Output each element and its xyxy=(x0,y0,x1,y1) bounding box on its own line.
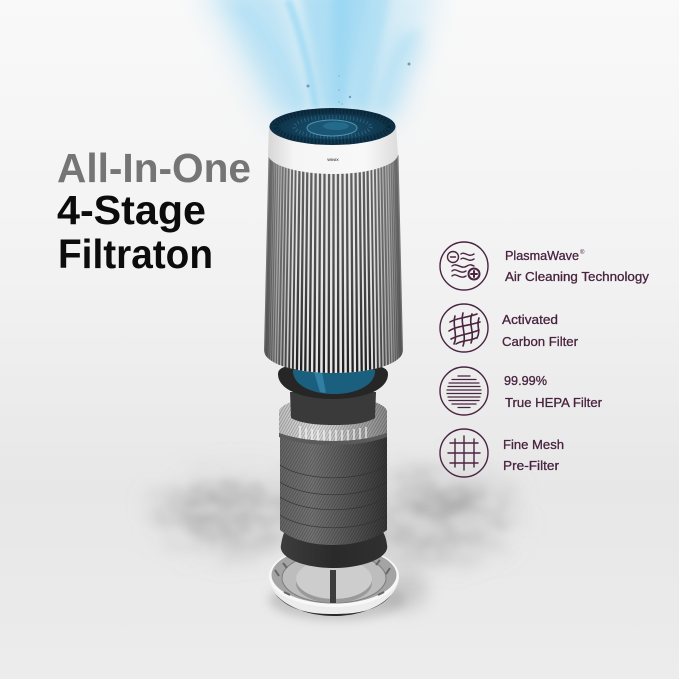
label: Fine Mesh xyxy=(503,437,564,452)
outer striped cylinder body xyxy=(264,155,403,373)
label: 99.99% xyxy=(504,373,547,388)
label: True HEPA Filter xyxy=(505,395,603,410)
icon: plasma waves xyxy=(440,242,488,290)
top air outlet grille xyxy=(270,108,396,145)
title xyxy=(57,145,251,277)
label xyxy=(503,437,564,473)
label: Carbon Filter xyxy=(502,334,579,349)
title: Filtraton xyxy=(58,231,213,277)
white top band xyxy=(268,126,398,174)
label: ® xyxy=(580,249,585,256)
feature: carbon filter xyxy=(440,304,579,352)
icon: HEPA lines xyxy=(440,367,488,415)
feature: pre-filter xyxy=(440,429,564,477)
clean blue air stream xyxy=(195,0,440,125)
label: Air Cleaning Technology xyxy=(505,269,650,284)
feature: PlasmaWave xyxy=(440,242,650,290)
feature: HEPA filter xyxy=(440,367,603,415)
title: 4-Stage xyxy=(57,187,206,233)
brand mark: WINIX xyxy=(327,157,339,162)
black gasket neck xyxy=(290,392,376,425)
black foam gasket, lower xyxy=(281,528,387,568)
icon: fine mesh grid xyxy=(440,429,488,477)
grey smoke clouds xyxy=(157,473,514,610)
dark HEPA filter cylinder xyxy=(280,425,387,545)
air particles xyxy=(306,62,410,105)
purifier base tray xyxy=(269,545,405,620)
title: All-In-One xyxy=(57,145,251,191)
label xyxy=(505,248,650,284)
label xyxy=(502,312,579,349)
label: Activated xyxy=(502,312,558,327)
light carbon filter section xyxy=(279,396,387,445)
label xyxy=(504,373,603,410)
icon: carbon mesh xyxy=(440,304,488,352)
black collar ring with blue interior xyxy=(278,366,388,399)
label: Pre-Filter xyxy=(503,458,560,473)
label: PlasmaWave xyxy=(505,248,579,263)
